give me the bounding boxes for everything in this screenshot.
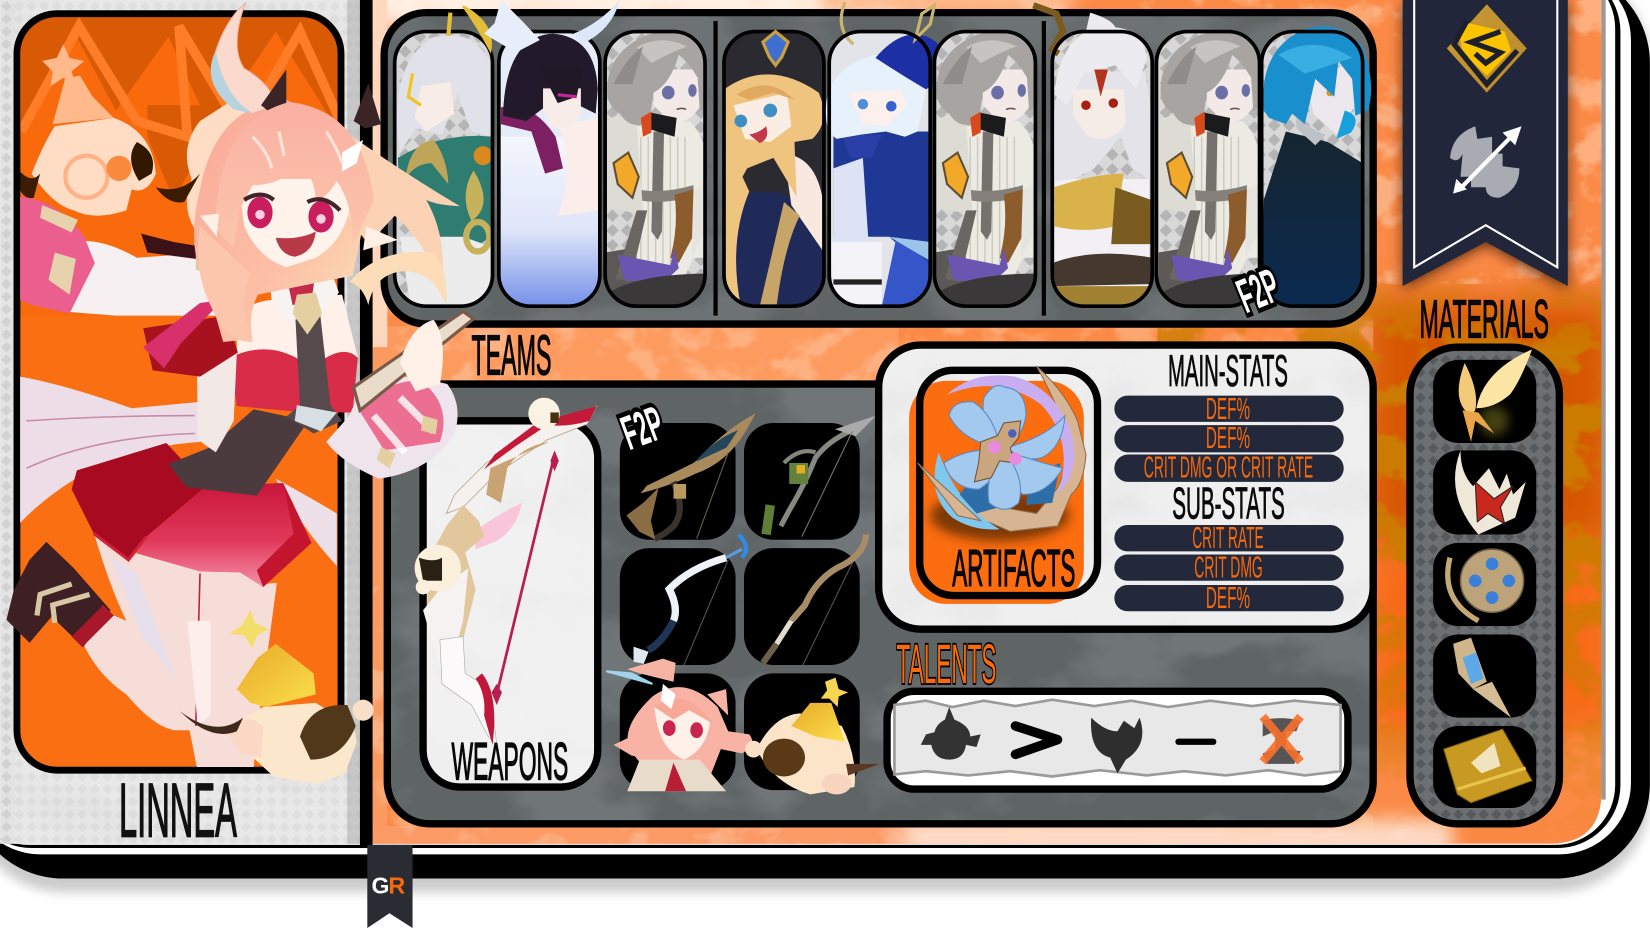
panel: talent priority	[887, 691, 1348, 789]
icon: skill two	[1091, 718, 1142, 773]
bookmark ribbon with logo: G	[372, 872, 389, 898]
stat pill: def	[1114, 581, 1344, 615]
artifact card: ARTIFACTS	[952, 539, 1075, 597]
portrait: albedo team two	[934, 32, 1040, 309]
portrait: white-blue hair navy coat	[826, 2, 948, 306]
icon: moomoo chibi	[745, 678, 880, 794]
face	[238, 179, 353, 267]
icon: geo element	[1447, 4, 1527, 93]
portrait: albedo team one	[605, 32, 711, 309]
mouth	[276, 231, 316, 257]
stat pill: sands	[1114, 392, 1344, 426]
arrow: equal dash	[1179, 739, 1213, 745]
bookmark ribbon with logo: R	[388, 872, 405, 898]
book spine	[360, 0, 373, 848]
left sleeve	[20, 197, 234, 368]
portrait: blue hair dark coat	[1262, 26, 1371, 306]
icon: crossed skill three	[1263, 717, 1301, 764]
panel: weapons card	[415, 398, 598, 792]
portrait: dark hair white dress	[484, 0, 620, 306]
skirt	[72, 443, 312, 587]
text: LINNEA	[119, 768, 237, 853]
icon: signature bow	[415, 398, 597, 745]
icon: blue gem medal	[1448, 549, 1524, 621]
tie	[286, 303, 342, 433]
icon: skill one	[921, 707, 981, 760]
coat tail	[20, 377, 200, 523]
icon: white and blue bow	[635, 534, 746, 665]
portrait: blonde navy dress	[724, 32, 825, 306]
wing	[211, 3, 381, 128]
illustration: linnea character	[6, 3, 474, 784]
bangs	[216, 102, 374, 247]
stat pill: goblet	[1114, 421, 1344, 455]
ears	[200, 214, 398, 250]
stat pill: goblet: DEF%	[1206, 421, 1250, 455]
corset	[168, 409, 308, 496]
stat pill: circlet	[1114, 451, 1344, 485]
eyes	[244, 195, 340, 233]
icon: green iron bow	[766, 417, 874, 537]
icon: linnea chibi portrait	[606, 659, 752, 791]
stat pill: sands: DEF%	[1206, 392, 1250, 426]
background moomoo silhouette left	[19, 44, 156, 216]
back hair	[194, 100, 366, 342]
coat collar	[197, 352, 237, 452]
legs	[80, 532, 277, 767]
right arm and book	[326, 311, 474, 479]
icon: white feather crest	[1455, 450, 1526, 534]
small moomoo companion	[180, 610, 374, 784]
collar	[268, 258, 339, 321]
icon: wooden bow	[763, 534, 866, 665]
sticker: F2P weapon: F2P	[615, 396, 671, 461]
panel: artifacts and stats: MAIN-STATS	[1168, 347, 1288, 396]
chest	[237, 295, 358, 360]
left strands	[198, 226, 253, 342]
icon: bow weapon type	[1450, 126, 1522, 198]
stat pill: def: DEF%	[1206, 581, 1250, 615]
stat pill: crit rate: CRIT RATE	[1192, 521, 1264, 555]
stat pill: circlet: CRIT DMG OR CRIT RATE	[1144, 451, 1313, 485]
portrait: silver hair green cloak	[395, 6, 493, 306]
icon: bronze bow	[627, 415, 755, 539]
stat pill: crit dmg: CRIT DMG	[1194, 551, 1263, 585]
artifact card	[909, 366, 1098, 604]
panel: teams	[384, 0, 1373, 324]
panel: lower build panel	[387, 384, 1373, 824]
top	[229, 349, 358, 412]
panel: artifacts and stats: SUB-STATS	[1172, 480, 1285, 529]
text: TEAMS	[471, 325, 551, 388]
bookmark ribbon with logo	[367, 845, 413, 928]
stat pill: crit rate	[1114, 521, 1344, 555]
portrait: white hair gold top	[1033, 5, 1153, 306]
orange page background	[316, 0, 1616, 856]
right strands	[342, 137, 460, 305]
sticker: F2P team: F2P	[1230, 259, 1287, 324]
icon: crystal spike	[1453, 638, 1511, 718]
stat pill: crit dmg	[1114, 551, 1344, 585]
icon: artifact flower	[918, 366, 1086, 541]
text: TALENTS	[897, 633, 997, 695]
boot	[6, 542, 114, 647]
panel: artifacts and stats	[879, 345, 1373, 629]
icon: golden book	[1444, 729, 1532, 803]
portrait: albedo team three	[1156, 32, 1264, 309]
icon: golden wings	[1459, 349, 1532, 442]
panel: character card background	[15, 14, 347, 779]
arrow: greater than	[1015, 726, 1058, 754]
weapon options grid	[606, 415, 880, 794]
ribbon: element and weapon type	[1403, 0, 1568, 286]
panel: materials	[1410, 347, 1559, 824]
panel: weapons card: WEAPONS	[451, 733, 568, 792]
left page paper	[0, 0, 360, 844]
bag	[143, 316, 238, 377]
